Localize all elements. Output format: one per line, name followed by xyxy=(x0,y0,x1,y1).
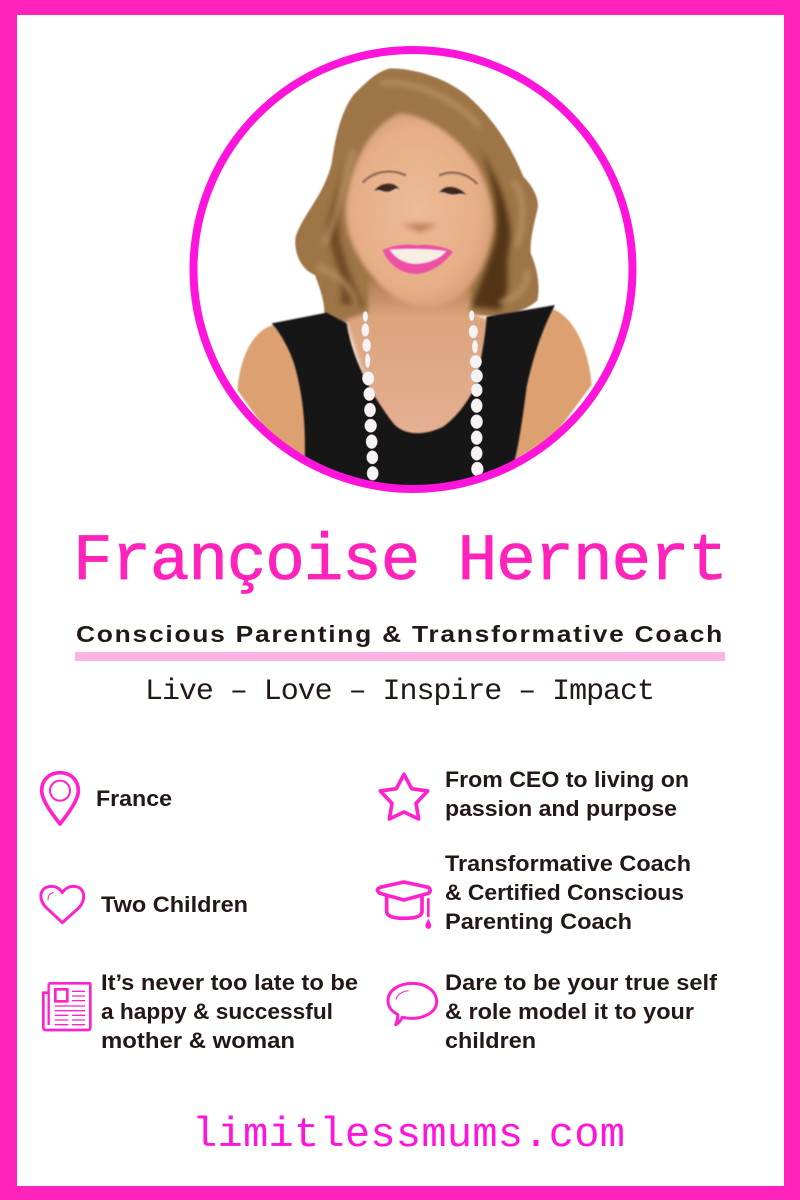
left arm xyxy=(237,325,310,463)
item: from CEO xyxy=(380,767,689,821)
item: coach credentials xyxy=(377,851,691,934)
eye whites xyxy=(376,188,465,196)
text: never too late: mother & woman xyxy=(101,1028,295,1053)
neck and chest skin xyxy=(345,280,490,450)
item: never too late xyxy=(43,970,358,1053)
portrait photo in circle xyxy=(194,50,632,507)
text: never too late: a happy & successful xyxy=(101,999,333,1024)
hair shadow right xyxy=(472,150,511,310)
item: Two Children xyxy=(41,886,248,923)
lips xyxy=(383,245,453,274)
irises xyxy=(374,184,467,195)
website footer: limitlessmums.com xyxy=(192,1111,625,1159)
necklace xyxy=(361,310,483,480)
subtitle underline xyxy=(75,652,725,661)
text: coach credentials xyxy=(445,851,691,934)
text: coach credentials: Parenting Coach xyxy=(445,909,632,934)
icon: star xyxy=(380,774,428,819)
icon: map pin xyxy=(42,773,78,824)
text: never too late: It’s never too late to be xyxy=(101,970,358,995)
text: from CEO: passion and purpose xyxy=(445,796,677,821)
text: coach credentials: & Certified Conscious xyxy=(445,880,684,905)
label: France: France xyxy=(96,786,172,811)
teeth xyxy=(389,249,447,264)
icon: speech bubble xyxy=(388,983,437,1025)
text: dare to be: children xyxy=(445,1028,536,1053)
item: dare to be xyxy=(388,970,718,1053)
icon: newspaper xyxy=(43,983,90,1030)
face and facial features xyxy=(346,113,493,307)
black top xyxy=(272,305,555,507)
eyebrows xyxy=(363,172,477,183)
tagline: Live – Love – Inspire – Impact xyxy=(145,675,655,709)
hair shadow left xyxy=(327,153,365,307)
name heading: Françoise Hernert xyxy=(73,524,728,599)
subtitle: Conscious Parenting & Transformative Coach xyxy=(76,621,724,647)
face xyxy=(346,113,493,307)
magenta ring xyxy=(194,50,632,489)
text: dare to be: & role model it to your xyxy=(445,999,694,1024)
item: France xyxy=(42,773,172,824)
label: Two Children: Two Children xyxy=(101,892,248,917)
text: coach credentials: Transformative Coach xyxy=(445,851,691,876)
hair light streaks xyxy=(317,83,527,307)
icon: graduation cap xyxy=(377,882,431,928)
text: from CEO xyxy=(445,767,689,821)
text: dare to be xyxy=(445,970,718,1053)
right arm xyxy=(515,308,592,460)
nose shading xyxy=(401,222,439,232)
text: dare to be: Dare to be your true self xyxy=(445,970,718,995)
text: from CEO: From CEO to living on xyxy=(445,767,689,792)
text: never too late xyxy=(101,970,358,1053)
hair xyxy=(295,68,539,324)
icon: heart xyxy=(41,886,84,923)
